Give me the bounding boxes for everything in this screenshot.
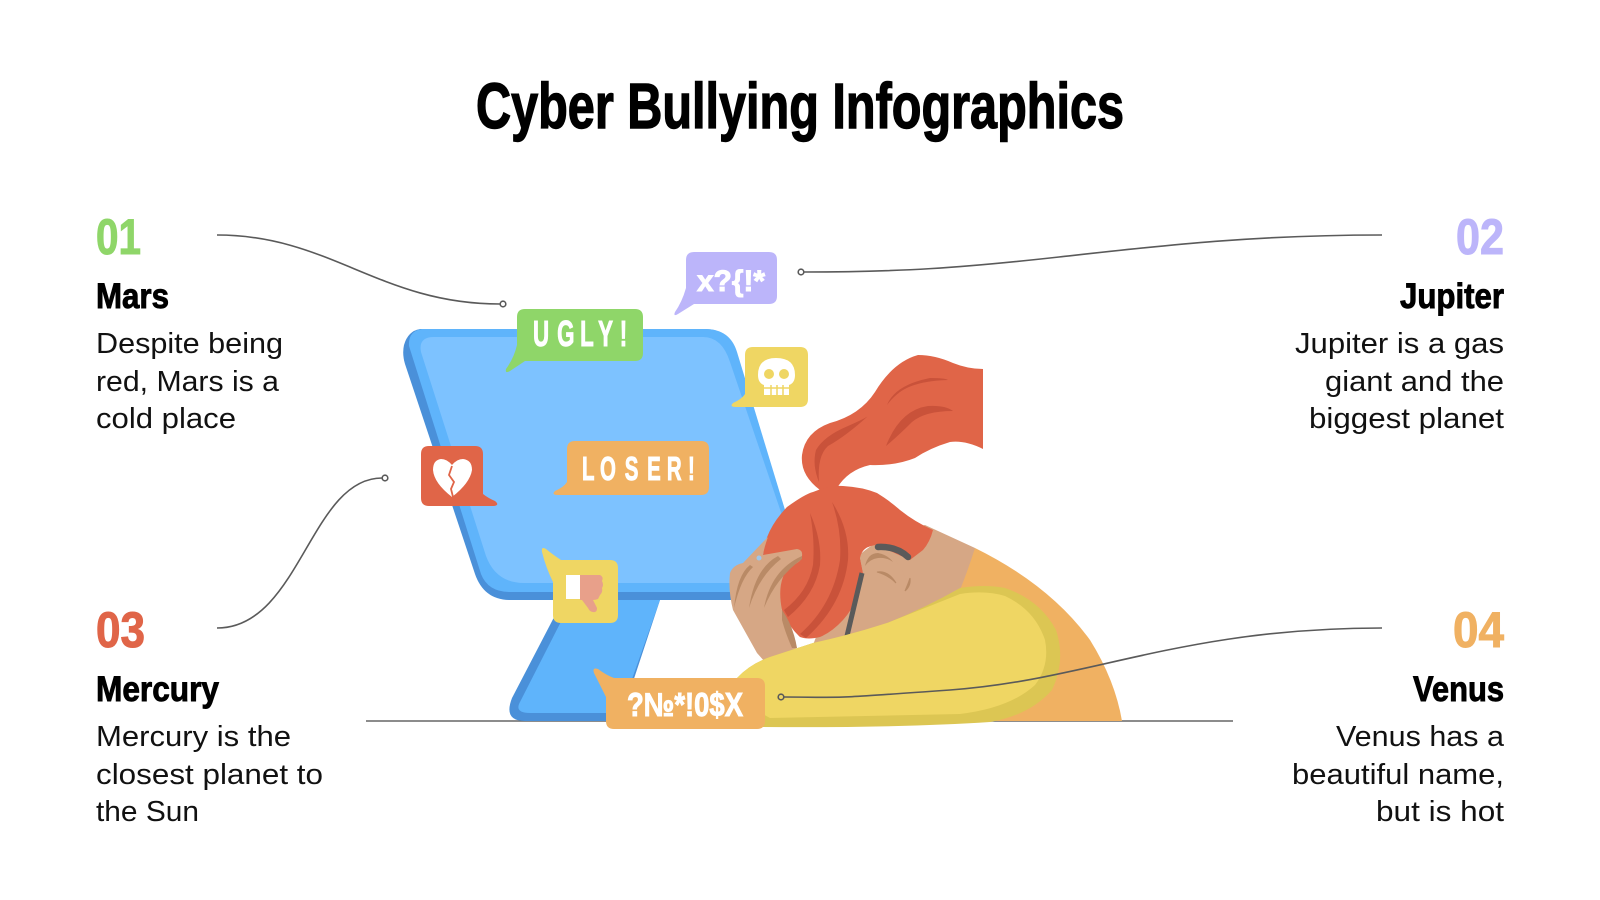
monitor frame (403, 329, 800, 600)
arm (737, 586, 1060, 727)
heading Venus: Venus (1413, 670, 1504, 709)
connector: Mercury (217, 475, 388, 628)
body (900, 548, 1122, 721)
bubble: thumbs down (542, 548, 618, 623)
neck and face (813, 525, 975, 645)
monitor screen (421, 337, 805, 583)
monitor stand (509, 600, 660, 721)
floor line (366, 720, 1233, 722)
number 02: 02 (1456, 209, 1504, 265)
description Mars: Despite being (96, 328, 283, 360)
panel: 04 Venus (1292, 602, 1505, 828)
description Jupiter: giant and the (1325, 366, 1504, 398)
description Venus: beautiful name, (1292, 759, 1504, 791)
description Mercury: closest planet to (96, 759, 323, 791)
glasses (847, 547, 908, 636)
description Mercury: the Sun (96, 796, 199, 828)
hair (763, 486, 933, 638)
description Mars (96, 328, 283, 435)
person (729, 355, 1122, 727)
hand (729, 537, 802, 662)
title: Cyber Bullying Infographics (476, 70, 1124, 142)
icon: thumbs down (566, 575, 603, 612)
description Mercury (96, 721, 323, 828)
ear (860, 549, 910, 591)
panel: 01 Mars (96, 209, 283, 435)
bubble: skull (732, 347, 808, 407)
heading Mercury: Mercury (96, 670, 219, 709)
bubble: LOSER (554, 441, 709, 495)
monitor (403, 329, 810, 721)
number 01: 01 (96, 209, 141, 265)
bubble: symbols purple: x?{!* (697, 265, 765, 298)
description Venus: but is hot (1376, 796, 1504, 828)
description Jupiter (1295, 328, 1504, 435)
bubble: LOSER: LOSER! (582, 450, 695, 487)
panel: 03 Mercury (96, 602, 323, 828)
bubble: symbols orange (594, 668, 765, 729)
bubble: broken heart (421, 446, 497, 506)
connector: Jupiter (798, 235, 1382, 275)
description Mars: cold place (96, 403, 236, 435)
ponytail (802, 355, 983, 490)
bubble: UGLY (506, 309, 643, 372)
icon: skull (758, 358, 795, 395)
description Jupiter: biggest planet (1309, 403, 1504, 435)
connector: Venus (778, 628, 1382, 700)
description Jupiter: Jupiter is a gas (1295, 328, 1504, 360)
number 03: 03 (96, 602, 145, 658)
icon: broken heart (433, 459, 472, 497)
heading Jupiter: Jupiter (1400, 277, 1504, 316)
description Venus (1292, 721, 1505, 828)
description Mars: red, Mars is a (96, 366, 280, 398)
connector: Mars (217, 235, 506, 307)
bubble: UGLY: UGLY! (533, 315, 627, 354)
description Venus: Venus has a (1336, 721, 1505, 753)
bubble: symbols orange: ?№*!0$X (627, 686, 743, 723)
panel: 02 Jupiter (1295, 209, 1504, 435)
description Mercury: Mercury is the (96, 721, 291, 753)
heading Mars: Mars (96, 277, 169, 316)
bubble: symbols purple (674, 252, 777, 315)
number 04: 04 (1453, 602, 1504, 658)
